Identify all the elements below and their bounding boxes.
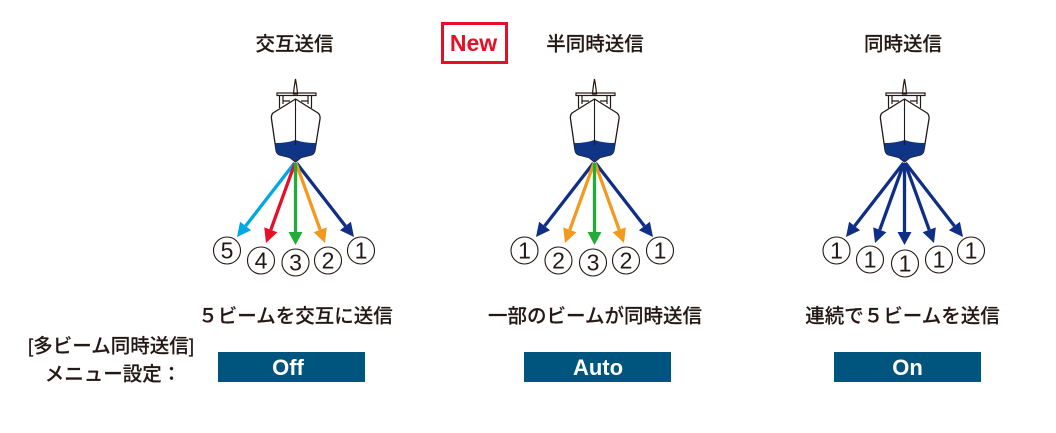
text: menu setting label: メニュー設定： (45, 364, 181, 386)
icon: ship (271, 79, 320, 162)
button: Off: Off (272, 355, 305, 380)
button: On (834, 352, 981, 382)
arrow: beam 3 (288, 163, 302, 245)
text: menu setting label (28, 336, 194, 386)
label: 1: 1 (355, 238, 367, 264)
arrow: beam 1 (296, 163, 354, 237)
label: 1: 1 (654, 238, 666, 264)
diagram: semi-simultaneous transmission (511, 79, 674, 276)
label: 4: 4 (255, 248, 268, 274)
label: 1 (926, 246, 952, 273)
arrow: outer right beam (596, 163, 653, 237)
arrow: beam 5 (237, 163, 294, 237)
label: 1 (511, 237, 538, 264)
label: 5: 5 (221, 238, 233, 264)
label: 2: 2 (322, 248, 334, 274)
button: Auto: Auto (573, 355, 623, 380)
label: 1 (348, 237, 374, 264)
heading: semi-simultaneous transmission: 半同時送信 (546, 34, 644, 56)
label: 1 (856, 246, 884, 273)
label: 1 (892, 250, 918, 277)
label: 2 (314, 247, 342, 274)
label: 2 (545, 247, 572, 274)
badge: New (442, 24, 506, 62)
label: 4 (248, 247, 274, 274)
label: 1: 1 (830, 238, 843, 264)
arrows: five simultaneous beams (846, 163, 963, 245)
arrow: center beam (588, 163, 602, 245)
button: Auto (524, 352, 671, 382)
arrow: inner left beam (563, 163, 594, 243)
label: 3 (580, 249, 606, 276)
arrow: beam 4 (264, 163, 295, 243)
heading: simultaneous transmission: 同時送信 (864, 34, 942, 56)
label: 1 (646, 237, 674, 264)
button: Off (218, 352, 365, 382)
label: 5 (214, 237, 240, 264)
label: 2: 2 (552, 248, 565, 274)
label: 2: 2 (620, 248, 632, 274)
heading: alternate transmission: 交互送信 (255, 34, 334, 56)
label: 3 (282, 249, 309, 276)
label: 1: 1 (933, 246, 945, 272)
arrow: beam 2 (296, 163, 327, 243)
caption: semi-simultaneous: 一部のビームが同時送信 (488, 306, 702, 328)
arrow: outer left beam (536, 163, 594, 237)
label: 1 (958, 237, 984, 264)
diagram: simultaneous transmission (823, 79, 984, 277)
button: On: On (892, 355, 923, 380)
label: 3: 3 (587, 250, 599, 276)
label: 1: 1 (965, 238, 977, 264)
label: 1: 1 (899, 250, 911, 276)
label: 1 (823, 237, 850, 264)
caption: simultaneous: 連続で５ビームを送信 (805, 306, 1000, 328)
text: menu setting label: [多ビーム同時送信] (28, 336, 194, 358)
label: 2 (612, 247, 640, 274)
icon: ship (570, 79, 619, 162)
icon: ship (880, 79, 929, 162)
label: 1: 1 (864, 246, 876, 272)
caption: alternate: ５ビームを交互に送信 (198, 306, 393, 328)
diagram: alternate transmission (214, 79, 374, 276)
label: 1: 1 (518, 238, 531, 264)
label: 3: 3 (289, 250, 302, 276)
badge: New: New (450, 30, 497, 56)
arrow: inner right beam (595, 163, 626, 243)
